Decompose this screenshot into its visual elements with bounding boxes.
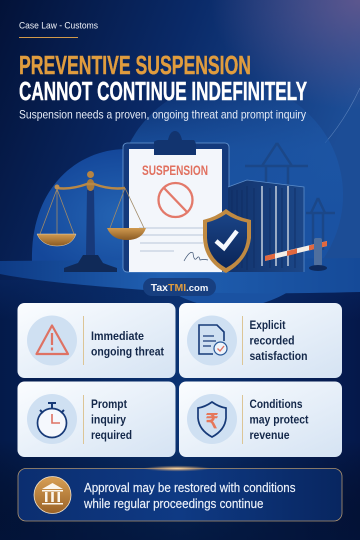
signature	[184, 252, 208, 261]
icon: scales of justice	[37, 171, 146, 272]
card text	[250, 397, 308, 442]
clipboard clip	[154, 131, 196, 155]
title	[19, 50, 307, 106]
hero floor	[0, 258, 360, 293]
title: PREVENTIVE SUSPENSION	[19, 50, 251, 80]
icon: stopwatch	[27, 394, 77, 444]
card: prompt inquiry required	[18, 382, 176, 457]
card text: satisfaction	[250, 349, 308, 363]
card text: may protect	[250, 412, 308, 426]
card: explicit recorded satisfaction	[179, 303, 342, 378]
card: conditions may protect revenue	[179, 382, 342, 457]
card text	[91, 329, 164, 358]
label: Case Law - Customs: Case Law - Customs	[19, 20, 98, 32]
notice heading: SUSPENSION	[142, 162, 208, 178]
card text	[250, 318, 308, 363]
subtitle: Suspension needs a proven, ongoing threat and prompt inquiry	[19, 108, 306, 122]
card text: Prompt	[91, 397, 127, 411]
card text: recorded	[250, 334, 294, 348]
card text: ongoing threat	[91, 344, 164, 358]
logo badge: TaxTMI.com	[151, 282, 208, 294]
icon: rupee shield: ₹	[206, 411, 219, 433]
accent rule	[19, 37, 78, 38]
logo badge	[143, 278, 216, 296]
card text	[91, 397, 132, 442]
card text: Immediate	[91, 329, 144, 343]
icon: rupee shield	[187, 394, 237, 444]
card text: required	[91, 428, 132, 442]
port cranes silhouette	[245, 143, 335, 250]
icon: shield with check	[203, 209, 251, 273]
icon: document with check	[187, 316, 237, 366]
card text: Explicit	[250, 318, 286, 332]
icon: prohibition sign	[158, 183, 192, 217]
banner text: while regular proceedings continue	[83, 497, 264, 511]
card: immediate ongoing threat	[18, 303, 176, 378]
shipping container	[228, 180, 304, 272]
card text: inquiry	[91, 412, 126, 426]
banner	[18, 466, 342, 521]
card text: revenue	[250, 428, 290, 442]
document lines	[139, 228, 203, 251]
banner text: Approval may be restored with conditions	[84, 481, 296, 495]
hero glow circles	[32, 82, 343, 308]
banner text	[83, 481, 295, 511]
icon: warning triangle	[27, 316, 77, 366]
icon: institution building	[34, 476, 71, 514]
clipboard with suspension notice	[123, 131, 229, 272]
card text: Conditions	[250, 397, 303, 411]
barrier gate	[265, 238, 327, 271]
